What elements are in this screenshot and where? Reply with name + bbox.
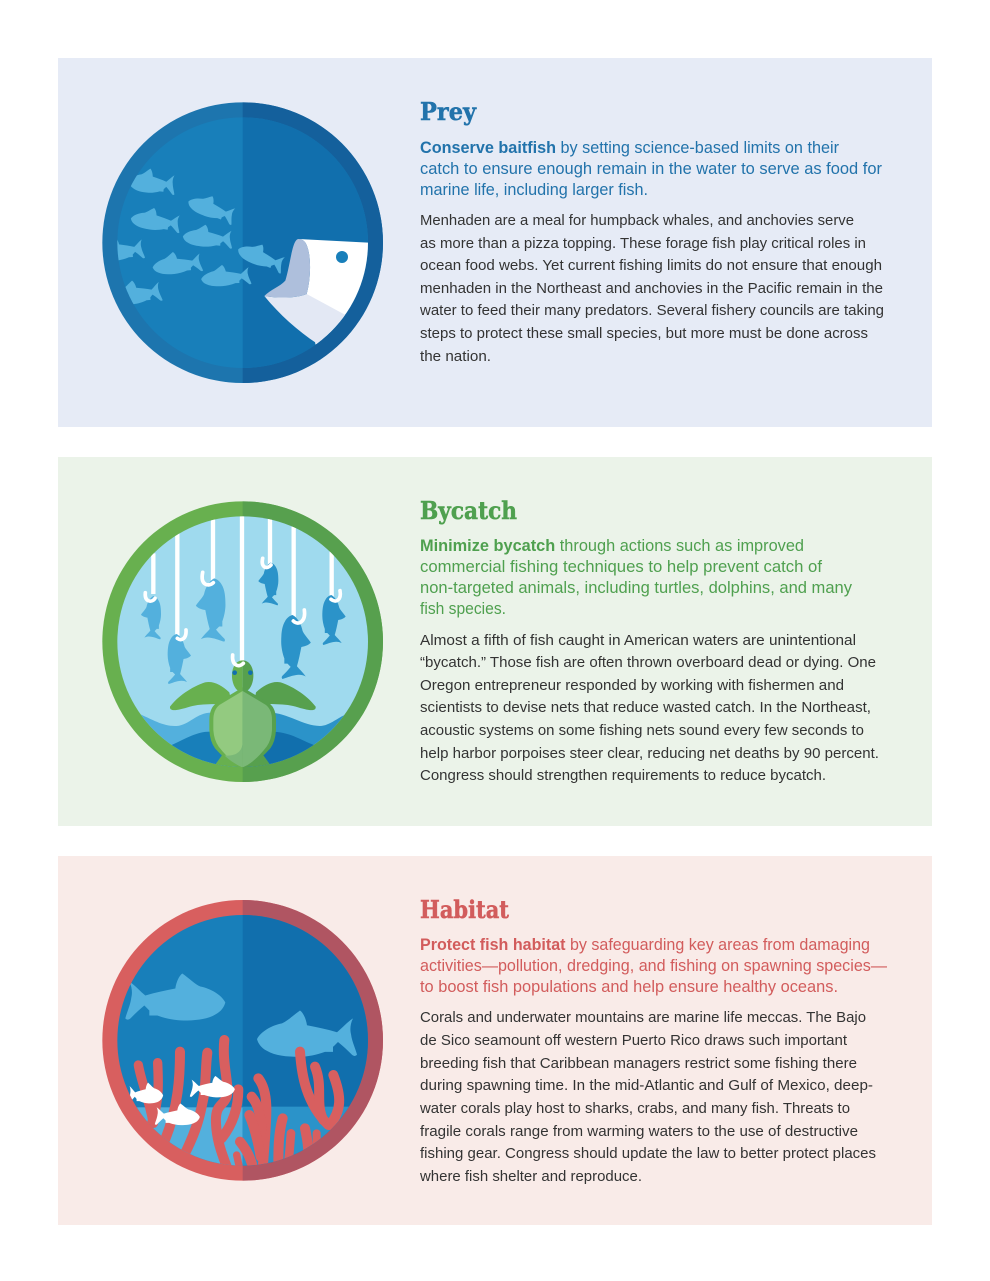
small white fish <box>128 1076 235 1125</box>
body text: habitat <box>419 1009 876 1185</box>
lead text: prey: Conserve baitfish by setting science-based limits on their <box>420 138 839 157</box>
icon: fish eye <box>336 251 348 263</box>
hooks <box>145 558 340 666</box>
body text: habitat: where fish shelter and reproduce. <box>419 1168 642 1185</box>
hooked fish <box>141 578 225 684</box>
heading: Bycatch: Bycatch <box>420 496 517 525</box>
body text: bycatch <box>420 632 879 784</box>
lead text: habitat: activities—pollution, dredging, and fishing on spawning species— <box>420 956 887 975</box>
panel: prey <box>58 58 932 427</box>
body text: prey: Menhaden are a meal for humpback whales, and anchovies serve <box>420 212 854 229</box>
panel: habitat <box>58 856 932 1225</box>
body text: bycatch: Almost a fifth of fish caught in American waters are unintentional <box>420 632 856 649</box>
body text: bycatch: Congress should strengthen requirements to reduce bycatch. <box>420 767 826 784</box>
lead text: bycatch: fish species. <box>420 599 506 618</box>
lead text: bycatch: commercial fishing techniques to help prevent catch of <box>420 557 822 576</box>
body text: habitat: during spawning time. In the mid-Atlantic and Gulf of Mexico, deep- <box>420 1077 873 1094</box>
coral <box>138 1040 339 1170</box>
body text: prey <box>419 212 884 365</box>
lead text: bycatch: non-targeted animals, including turtles, dolphins, and many <box>420 578 852 597</box>
body text: prey: water to feed their many predators. Several fishery councils are taking <box>419 302 884 319</box>
body text: bycatch: “bycatch.” Those fish are often thrown overboard dead or dying. One <box>420 654 876 671</box>
body text: habitat: water corals play host to sharks, crabs, and many fish. Threats to <box>419 1100 850 1117</box>
heading: Prey: Prey <box>420 97 477 126</box>
body text: habitat: de Sico seamount off western Puerto Rico draws such important <box>420 1032 848 1049</box>
body text: prey: ocean food webs. Yet current fishing limits do not ensure that enough <box>420 257 882 274</box>
icon: fish and coral reef <box>102 900 383 1181</box>
body text: habitat: fragile corals range from warming waters to the use of destructive <box>420 1123 858 1140</box>
body text: prey: the nation. <box>420 348 491 365</box>
body text: bycatch: acoustic systems on some fishing nets sound every few seconds to <box>420 722 864 739</box>
body text: bycatch: help harbor porpoises steer clear, reducing net deaths by 90 percent. <box>420 745 879 762</box>
fishing lines <box>153 516 332 662</box>
body text: prey: as more than a pizza topping. These forage fish play critical roles in <box>420 235 866 252</box>
lead text: bycatch: Minimize bycatch through actions such as improved <box>420 536 804 555</box>
lead text: bycatch <box>420 536 852 618</box>
icon: big fish eating baitfish <box>94 102 383 383</box>
lead text: habitat: to boost fish populations and help ensure healthy oceans. <box>420 977 838 996</box>
body text: prey: menhaden in the Northeast and anchovies in the Pacific remain in the <box>420 280 883 297</box>
panel: bycatch <box>58 457 932 826</box>
body text: habitat: breeding fish that Caribbean managers restrict some fishing there <box>420 1055 857 1072</box>
body text: bycatch: scientists to devise nets that reduce wasted catch. In the Northeast, <box>420 699 871 716</box>
body text: habitat: fishing gear. Congress should update the law to better protect places <box>420 1145 876 1162</box>
lead text: prey <box>420 138 882 199</box>
large fish <box>125 973 357 1057</box>
lead text: prey: marine life, including larger fish. <box>420 180 648 199</box>
lead text: habitat <box>420 935 887 996</box>
body text: prey: steps to protect these small species, but more must be done across <box>420 325 868 342</box>
body text: bycatch: Oregon entrepreneur responded by working with fishermen and <box>420 677 844 694</box>
lead text: prey: catch to ensure enough remain in the water to serve as food for <box>420 159 882 178</box>
icon: hooks, fish and turtle <box>102 501 383 790</box>
turtle <box>170 660 316 768</box>
body text: habitat: Corals and underwater mountains are marine life meccas. The Bajo <box>420 1009 866 1026</box>
heading: Habitat: Habitat <box>420 895 509 924</box>
lead text: habitat: Protect fish habitat by safeguarding key areas from damaging <box>420 935 870 954</box>
